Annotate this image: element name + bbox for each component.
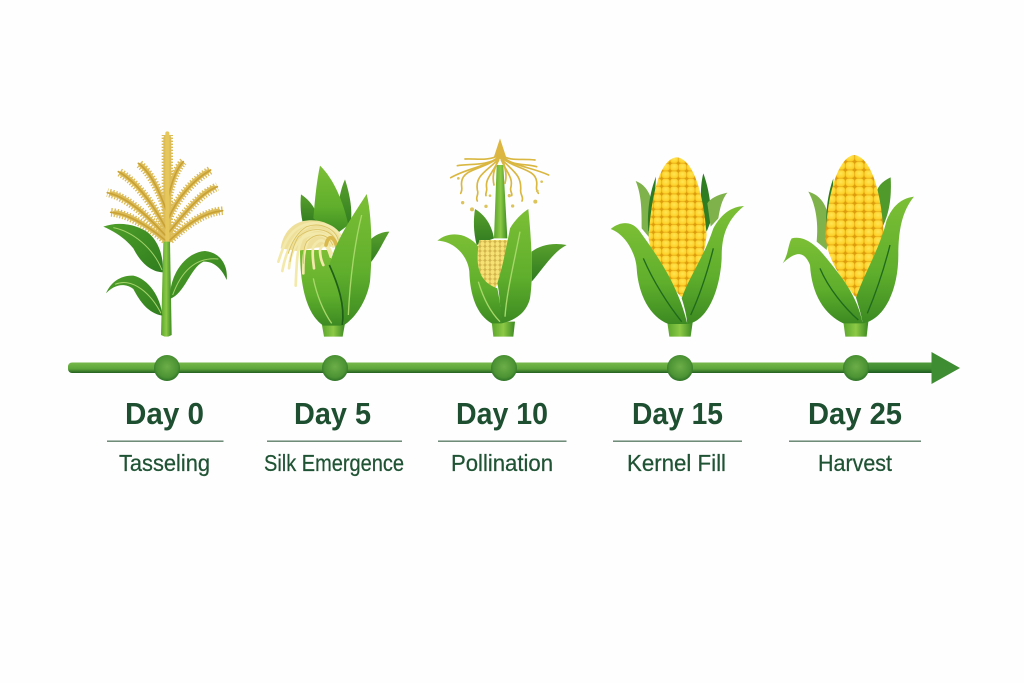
silk strands (278, 220, 341, 286)
stem (161, 242, 172, 337)
central stalk (494, 165, 507, 238)
leaf: right (170, 251, 227, 299)
stem base (492, 322, 515, 337)
stem base (843, 322, 868, 337)
stem base (322, 323, 345, 337)
back husk leaves (808, 192, 829, 250)
stem base (667, 322, 693, 337)
label: day 5 silk emergence: Day 5 (294, 396, 371, 431)
husk left leaf (783, 238, 863, 323)
small cob (477, 240, 511, 288)
corn cob (649, 157, 707, 298)
label: day 15 kernel fill: Kernel Fill (627, 450, 726, 476)
husk right leaf (682, 206, 744, 324)
back leaves (474, 209, 494, 245)
label: day 15 kernel fill (613, 396, 742, 476)
plant: kernel fill (611, 157, 744, 337)
label: day 25 harvest: Harvest (818, 450, 893, 476)
husk right leaf (856, 197, 914, 323)
label: day 0 tasseling (107, 396, 224, 476)
leaf: lower left (106, 276, 162, 316)
label: day 5 silk emergence: Silk Emergence (264, 450, 404, 476)
plant: silk emergence (278, 166, 389, 337)
back husk leaves (636, 181, 653, 238)
plant: tasseling (103, 133, 227, 337)
pollen grains (457, 177, 543, 211)
timeline arrow (68, 352, 960, 384)
label: day 25 harvest (789, 396, 921, 476)
label: day 0 tasseling: Day 0 (125, 396, 204, 431)
timeline node: day 10 (491, 355, 517, 381)
label: day 10 pollination (438, 396, 566, 476)
tassel (107, 133, 223, 240)
pollen strands (451, 155, 549, 201)
label: day 0 tasseling: Tasseling (119, 450, 210, 476)
label: day 15 kernel fill: Day 15 (632, 396, 723, 431)
husk right leaf (497, 209, 532, 323)
husk back leaves (301, 166, 389, 265)
husk right leaf (329, 194, 371, 326)
label: day 5 silk emergence (264, 396, 404, 476)
timeline node: day 5 (322, 355, 348, 381)
label: day 25 harvest: Day 25 (808, 396, 902, 431)
label: day 10 pollination: Pollination (451, 450, 553, 476)
timeline node: day 0 (154, 355, 180, 381)
timeline node: day 15 (667, 355, 693, 381)
husk left leaf (611, 223, 687, 324)
timeline node: day 25 (843, 355, 869, 381)
leaf: upper left (103, 224, 163, 272)
corn cob (826, 155, 884, 298)
husk left leaf (437, 234, 502, 323)
husk left leaf (300, 250, 343, 326)
plant: pollination (437, 138, 567, 337)
label: day 10 pollination: Day 10 (456, 396, 548, 431)
plant: harvest (783, 155, 914, 337)
tassel tip (494, 138, 506, 157)
